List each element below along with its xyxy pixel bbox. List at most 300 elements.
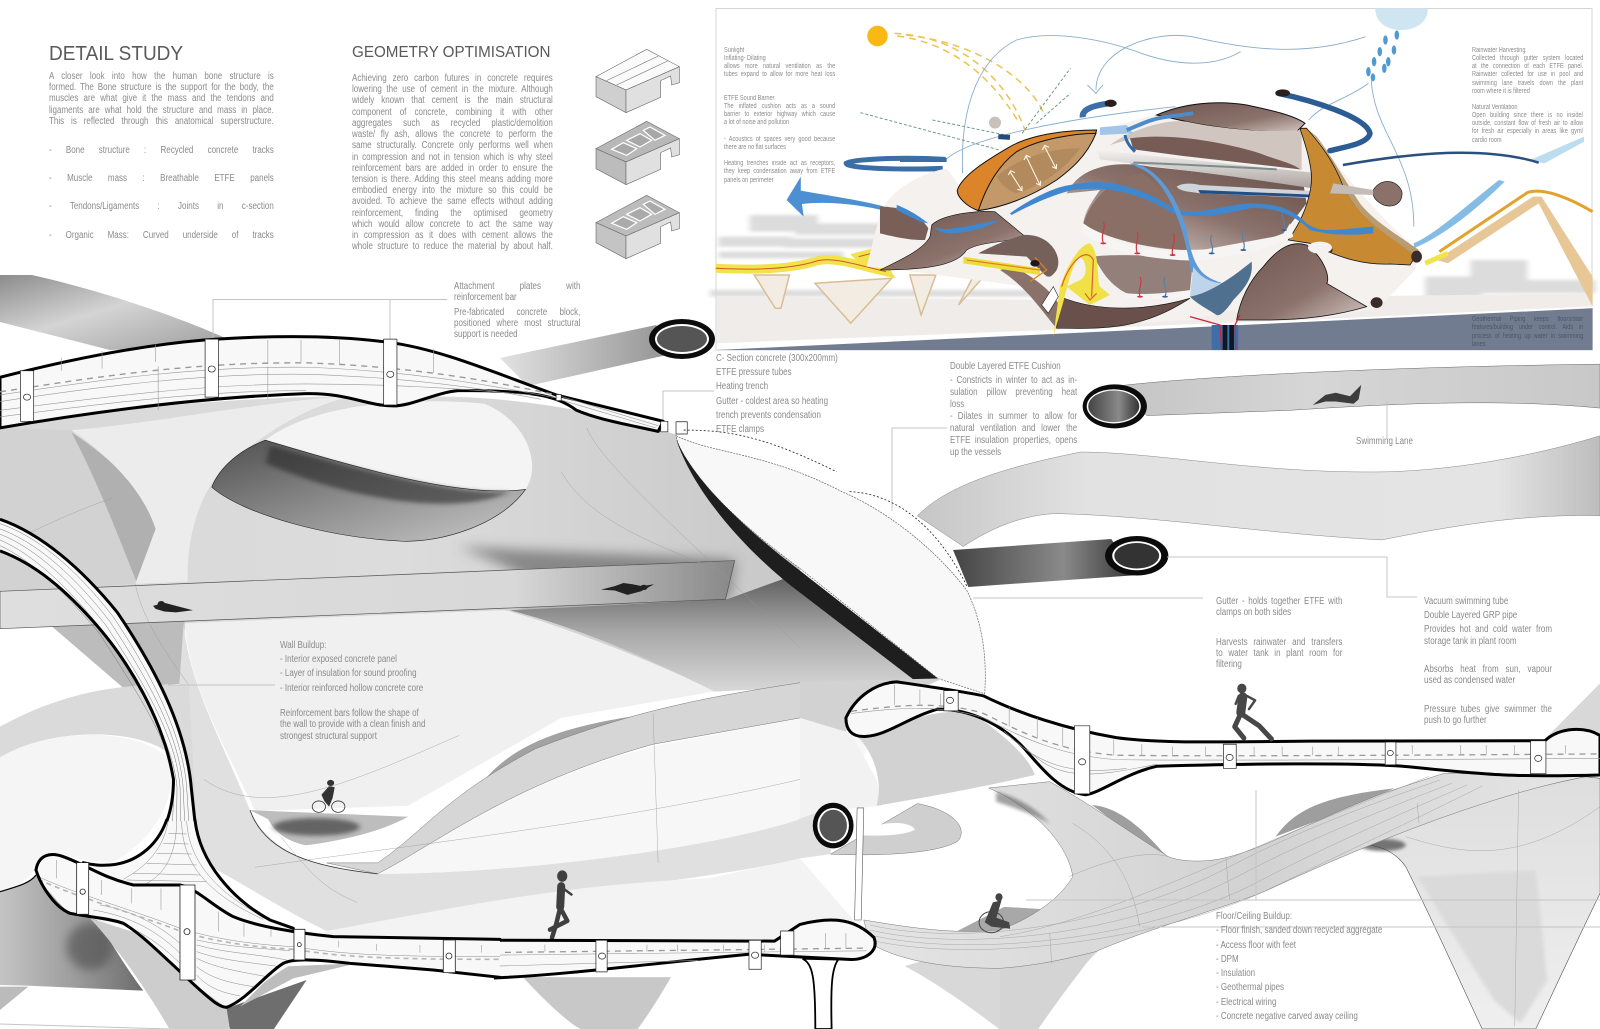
wall and track fill (36, 820, 500, 1007)
inset note: rainwater: Collected through gutter system located (1472, 55, 1583, 62)
note: vacuum tube: Vacuum swimming tube (1424, 596, 1508, 606)
ochre strip (1307, 128, 1419, 255)
ribbon body (864, 773, 1586, 968)
note: wall buildup: Wall Buildup: (280, 640, 326, 650)
note: absorbs heat: used as condensed water (1424, 675, 1515, 686)
inset note: sound barrier: ETFE Sound Barrier (724, 94, 774, 102)
right lower shell (510, 573, 939, 692)
inset note: rainwater: room where it is filtered (1472, 88, 1530, 95)
inset note: sunlight: allows more natural ventilation as the (724, 63, 835, 70)
swimmer far (601, 583, 654, 595)
upper band dark (1130, 137, 1300, 169)
note: concrete block: positioned where most structural (454, 318, 580, 329)
label: swimming lane: Swimming Lane (1356, 436, 1413, 447)
left panel shadow wedge (71, 432, 156, 583)
dark sockets (1327, 247, 1422, 308)
note: constricts: sulation pillow preventing heat (950, 387, 1077, 398)
ledge edge (250, 810, 378, 874)
note: floor and ceiling buildup: - Electrical wiring (1216, 997, 1276, 1008)
dark dome edge (676, 439, 939, 681)
note: vacuum tube: Double Layered GRP pipe (1424, 610, 1517, 621)
text: geometry body: waste/ fly ash, allows the concrete to perform the (352, 129, 553, 140)
runner man (1235, 684, 1271, 739)
bottom funnel left (905, 938, 1098, 1029)
text: detail study intro: muscles are what give it the mass and the tendons and (49, 93, 274, 104)
opening shadow (212, 440, 526, 541)
inflate arrows (1008, 145, 1057, 191)
inset note: geothermal (1472, 316, 1584, 348)
inset note: heating trenches: they keep condensation away from ETFE (724, 168, 835, 175)
inset note: sound barrier (724, 94, 835, 126)
note: concrete block: Pre-fabricated concrete block, (454, 307, 580, 318)
yellow loop (1053, 243, 1110, 337)
left lobe (880, 211, 1023, 270)
note: constricts: loss (950, 399, 964, 410)
light funnel (1190, 267, 1225, 297)
text: geometry body: reinforcement, finding the optimised geometry (352, 208, 553, 219)
note: wall buildup: - Layer of insulation for sound proofing (280, 668, 417, 679)
right track section (494, 682, 1600, 1029)
right ochre panel (1288, 128, 1419, 265)
wall outer line (0, 519, 195, 821)
text: detail study intro: ligaments are what hold the structure and mass in place. (49, 105, 274, 116)
note: attachment plates: Attachment plates with (454, 281, 580, 292)
hollow (1308, 242, 1332, 254)
mid shell shading (459, 547, 735, 608)
stem black two (1229, 325, 1234, 350)
left blue exit ribbon (787, 177, 934, 232)
blue stream (1130, 163, 1223, 285)
note: c-section list: Gutter - coldest area so heating (716, 396, 828, 407)
yellow wedge (963, 257, 1040, 275)
text: anatomy list (49, 144, 274, 241)
inset note: geothermal: process of heating up water in swimming (1472, 333, 1583, 340)
note: concrete block (454, 307, 580, 340)
swimming lane strip (0, 561, 735, 629)
wall inner line (0, 551, 173, 821)
lower left flank (1000, 267, 1062, 328)
note: wall buildup: - Interior exposed concrete panel (280, 654, 397, 665)
note: c-section list: trench prevents condensation (716, 410, 821, 421)
note: dilates: - Dilates in summer to allow for (950, 411, 1077, 422)
text: geometry body: avoided. To achieve the same effects without adding (352, 196, 553, 207)
wall section band (0, 519, 195, 821)
inset note: ventilation: outside, constant flow of fresh air to allow (1472, 120, 1583, 127)
wedge hole (1030, 260, 1040, 267)
swim tube end (1083, 384, 1147, 428)
note: reinforcement bars: Reinforcement bars follow the shape of (280, 708, 419, 719)
inset note: rainwater (1472, 46, 1584, 95)
text: detail study intro: This is reflected through this anatomical superstructure. (49, 116, 274, 127)
lower ribbon continuation (799, 806, 836, 858)
inset note: heating trenches: panels on perimeter (724, 177, 774, 184)
note: floor and ceiling buildup: - Geothermal pipes (1216, 982, 1284, 993)
lower grey shell left (800, 678, 943, 733)
dome dotted second (849, 492, 967, 586)
dome clamp dotted (684, 430, 837, 472)
ribbon top right (917, 436, 1600, 547)
bottom track right joints (596, 931, 794, 972)
swimmer near (153, 601, 193, 612)
note: gutter: clamps on both sides (1216, 607, 1291, 618)
funnel wire lines (1406, 790, 1600, 1027)
right mountain strand (1439, 191, 1593, 252)
note: absorbs heat: Absorbs heat from sun, vapour (1424, 664, 1552, 674)
text: geometry body: lowering the use of cement in the mixture. Although (352, 84, 553, 95)
funnel blue grey (1190, 262, 1252, 315)
track outline thick (36, 820, 500, 1007)
inset note: sound barrier: a lot of noise and pollution (724, 119, 789, 126)
ring center (851, 823, 915, 836)
isometric block 3 (596, 195, 679, 259)
upper track section (0, 337, 967, 586)
inset panel: environmental section (710, 8, 1595, 350)
ground top highlight (717, 307, 1593, 349)
white bar tube (1097, 150, 1323, 189)
inset note: heating trenches (724, 160, 835, 184)
inset note: ventilation: cardio room (1472, 137, 1502, 144)
wall hatching (38, 820, 500, 996)
white fin (1042, 287, 1058, 313)
second tube blue strip (1198, 190, 1321, 198)
upper cap (1157, 103, 1305, 132)
ground shading (717, 293, 1593, 343)
right mountain arrow (1425, 253, 1448, 263)
inset note: acoustics: - Acoustics of spaces very good because (724, 136, 835, 143)
pale bottom wall (306, 858, 857, 940)
opening dark core (265, 445, 510, 504)
upper joints (20, 339, 687, 434)
orange inner (978, 133, 1096, 211)
note: floor and ceiling buildup: - Floor finish, sanded down recycled aggregate (1216, 925, 1382, 936)
note: concrete block: support is needed (454, 329, 518, 340)
lower middle dome (1093, 255, 1193, 294)
text: anatomy list: - Bone structure : Recycled concrete tracks (49, 144, 274, 156)
note: reinforcement bars: the wall to provide with a clean finish and (280, 719, 425, 730)
bottom track right truss (494, 933, 866, 966)
geothermal stem (1212, 325, 1238, 350)
inset note: geothermal: Geothermal Piping keeps floors/stair (1472, 316, 1583, 323)
note: attachment plates: reinforcement bar (454, 292, 517, 303)
note: reinforcement bars: strongest structural support (280, 731, 377, 742)
stem red (1190, 315, 1240, 350)
swimmer in tube (1313, 385, 1361, 405)
blob top edge (0, 875, 36, 892)
text: geometry body: widely known that cement is the main structural (352, 95, 553, 106)
top blue ribbon (1127, 113, 1193, 130)
note: floor and ceiling buildup: - Concrete negative carved away ceiling (1216, 1011, 1358, 1022)
wheelchair hump shade (953, 907, 1056, 933)
thin air currents (946, 35, 1414, 227)
hump a (1092, 805, 1188, 862)
text: geometry body: in compression and not in tension which is why steel (352, 152, 553, 163)
text: geometry body: same structurally. Concrete only performs well when (352, 140, 553, 151)
text: geometry body: tension is there. Adding this steel means adding more (352, 174, 553, 185)
white rib two (1123, 290, 1193, 299)
ring loop (831, 804, 961, 855)
large funnel (1364, 777, 1600, 1029)
inset note: sound barrier: barrier to exterior highway which cause (724, 111, 835, 118)
note: c-section list: ETFE clamps (716, 424, 764, 435)
ribbon inner shadow (996, 792, 1050, 823)
note: dilates: natural ventilation and lower the (950, 423, 1077, 434)
red heat squiggles (1102, 222, 1174, 297)
small node tube (998, 134, 1010, 140)
note: harvests: Harvests rainwater and transfers (1216, 636, 1342, 648)
cone supports (754, 272, 988, 323)
wall fill (0, 519, 195, 821)
inset note: acoustics: there are no flat surfaces (724, 144, 786, 151)
note: attachment plates (454, 281, 580, 303)
lower-left grey parallelogram (51, 621, 185, 687)
inset note: sunlight: Sunlight (724, 46, 744, 54)
vent streak right lower (1414, 180, 1505, 248)
blurred city blocks (710, 215, 1595, 300)
bottom track joints (77, 863, 455, 980)
text: detail study intro (49, 70, 274, 127)
lower right ribbon group (864, 683, 1600, 1029)
stem black (1223, 325, 1227, 350)
funnel shadow (1360, 839, 1406, 851)
bottom track left section (0, 820, 500, 1029)
yellow duct red core (716, 235, 926, 272)
bottom brown (1057, 297, 1190, 328)
note: gutter (1216, 596, 1342, 618)
S ribbon (327, 683, 816, 874)
upper track fill (0, 337, 663, 431)
note: floor and ceiling buildup: - DPM (1216, 954, 1239, 965)
top-left track tube (0, 275, 240, 350)
text: anatomy list: - Organic Mass: Curved underside of tracks (49, 230, 274, 241)
inset note: acoustics (724, 136, 835, 151)
inset note: rainwater: Rainwater Harvesting (1472, 46, 1526, 54)
text: geometry body: component of concrete, combining it with other (352, 107, 553, 118)
text: detail study intro: formed. The Bone structure is the support for the body, the (49, 82, 274, 93)
note: harvests: to water tank in plant room for (1216, 648, 1342, 659)
inset note: rainwater: swimming lane travels down the plant (1472, 80, 1583, 87)
inset note: rainwater: at the connection of each ETFE panel. (1472, 63, 1583, 70)
right mountain tan (1437, 197, 1593, 307)
central building (867, 89, 1422, 350)
lower right lump (1237, 244, 1367, 320)
inset note: sunlight (724, 46, 835, 78)
heat vents red (1100, 242, 1176, 298)
blue ribbon main (1010, 182, 1373, 235)
dashed green vent lines (860, 68, 1070, 150)
ETFE dome (676, 436, 985, 694)
note: pressure tubes: push to go further (1424, 715, 1486, 726)
note: c-section list: ETFE pressure tubes (716, 367, 792, 378)
inset note: ventilation (1472, 104, 1584, 144)
vertical stem (855, 808, 864, 920)
top blue patch (1100, 125, 1133, 135)
funnel under track (90, 918, 240, 1029)
left lump (880, 207, 928, 240)
text: geometry body: Achieving zero carbon futures in concrete requires (352, 73, 553, 84)
small right funnel (1547, 683, 1600, 740)
ground slab (717, 308, 1593, 350)
vent streak right upper (1530, 137, 1584, 163)
hump b (1276, 788, 1394, 837)
text: detail study intro: A closer look into how the human bone structure is (49, 70, 274, 82)
tube section ellipse (813, 803, 854, 848)
inset note: geothermal: lanes (1472, 341, 1485, 348)
note: double layered heading: Double Layered ETFE Cushion (950, 361, 1061, 372)
inset note: heating trenches: Heating trenches inside act as receptors, (724, 160, 835, 167)
rain drops (1366, 30, 1399, 81)
text: geometry body: aggregates such as recycled plastic/demolition (352, 118, 553, 129)
right side bump (1373, 181, 1402, 206)
right track fill (846, 682, 1600, 795)
note: constricts (950, 375, 1078, 410)
callout lines (0, 300, 1600, 1029)
pale lower wall (185, 610, 714, 811)
runner woman (550, 870, 571, 938)
inset note: geothermal: features/building under control. Aids in (1472, 324, 1583, 331)
inset note: ventilation: Natural Ventilation (1472, 104, 1517, 110)
inset note: rainwater: Rainwater collected for use in pool and (1472, 71, 1583, 78)
note: dilates (950, 411, 1077, 458)
text: geometry body: which would allow concrete to act the same way (352, 219, 553, 230)
text: geometry body: in compression as it does with cement allows the (352, 230, 553, 241)
orange inner darker (997, 148, 1080, 193)
text: geometry body: whole structure to reduce the material by about half. (352, 241, 553, 252)
note: constricts: - Constricts in winter to act as in- (950, 375, 1077, 386)
wavy dark stroke right (1343, 153, 1539, 165)
text: geometry body: embodied energy into the mixture so this could be (352, 185, 553, 196)
note: c-section list: Heating trench (716, 381, 768, 392)
note: gutter: Gutter - holds together ETFE with (1216, 596, 1342, 607)
ribbon hump (474, 713, 653, 793)
note: wall buildup: - Interior reinforced hollow concrete core (280, 683, 423, 694)
lower left dome (978, 235, 1058, 277)
main body shell (0, 396, 800, 692)
note: vacuum tube (1424, 596, 1517, 621)
title: detail study: DETAIL STUDY (49, 43, 183, 65)
note: floor and ceiling buildup: Floor/Ceiling Buildup: (1216, 911, 1292, 922)
second tube (953, 539, 1137, 587)
far left tubes (900, 160, 947, 169)
orange panel (957, 130, 1097, 211)
bar to bump (1330, 183, 1373, 195)
right half of lower art (676, 364, 1600, 1029)
note: provides water: Provides hot and cold water from (1424, 624, 1552, 635)
dark blob under track (0, 875, 143, 991)
ledge shadow (273, 818, 360, 836)
inset note: sunlight: Inflating- Dilating (724, 55, 766, 62)
sun rays dashed (894, 33, 1045, 130)
small node (989, 117, 1001, 129)
cloud (1375, 8, 1428, 30)
upper tube end (1275, 89, 1290, 97)
light arch (71, 395, 357, 584)
note: floor and ceiling buildup: - Insulation (1216, 968, 1255, 979)
swim tube (1116, 364, 1600, 416)
isometric block 2 (596, 121, 679, 185)
note: provides water: storage tank in plant room (1424, 636, 1516, 647)
text: anatomy list: - Tendons/Ligaments : Joints in c-section (49, 201, 274, 212)
note: floor and ceiling buildup: - Access floor with feet (1216, 940, 1296, 951)
isometric block 1 (596, 49, 679, 113)
left ribbon band (0, 685, 196, 837)
note: floor and ceiling buildup (1216, 911, 1382, 1022)
note: provides water (1424, 624, 1552, 647)
cyclist ledge (250, 810, 408, 845)
funnel core shade (1417, 870, 1547, 1023)
left white lobe (0, 735, 172, 891)
funnel bottom middle (523, 977, 671, 1029)
blue ribbon lower left (933, 220, 1000, 233)
white ribbon below (800, 718, 882, 821)
shell behind track (856, 712, 1035, 806)
text: geometry body: reinforcement bars are added in order to ensure the (352, 163, 553, 174)
small blue tube (1083, 103, 1110, 117)
upper blue tube (1278, 93, 1370, 151)
dome darker (1083, 173, 1190, 250)
wedge red line (967, 257, 1047, 282)
note: reinforcement bars (280, 708, 425, 742)
white shell (867, 113, 1419, 328)
thin column below track (803, 959, 838, 1029)
sun (867, 26, 888, 46)
top blue stem (1125, 135, 1135, 152)
title: geometry optimisation: GEOMETRY OPTIMISATION (352, 44, 550, 61)
right track truss (851, 685, 1600, 774)
wedge under joint (240, 963, 357, 1007)
note: c-section list: C- Section concrete (300x200mm) (716, 353, 838, 364)
small tube end (1105, 100, 1117, 107)
blue ribbon far left (897, 205, 928, 223)
lower architectural section (0, 364, 1600, 1029)
upper band (1110, 121, 1302, 170)
note: absorbs heat (1424, 664, 1552, 686)
bottom track end outline (494, 920, 875, 978)
cyclist (312, 780, 345, 812)
pressure tube behind upper track (500, 319, 715, 386)
panel frame (716, 8, 1592, 350)
inset note: ventilation: Open building since there is no inside/ (1472, 112, 1583, 119)
wheelchair user (979, 893, 1010, 933)
lower ribbon band (168, 623, 800, 931)
yellow loop red line (1062, 255, 1097, 300)
dark funnel right (227, 980, 307, 1029)
right track joints (944, 691, 1546, 794)
white lens (378, 718, 878, 874)
left tube (846, 158, 946, 169)
blob core shade (67, 923, 113, 970)
teal line (1133, 163, 1277, 169)
second tube (1177, 184, 1332, 198)
inset note: sunlight: tubes expand to allow for more heat loss (724, 71, 835, 78)
left bottom funnel (1000, 952, 1096, 1029)
white rib (1082, 223, 1293, 261)
upper track truss (0, 340, 658, 428)
note: pressure tubes (1424, 704, 1552, 726)
note: pressure tubes: Pressure tubes give swimmer the (1424, 704, 1552, 714)
text: geometry body (352, 73, 553, 252)
elliptical opening (265, 401, 532, 491)
text: anatomy list: - Muscle mass : Breathable ETFE panels (49, 173, 274, 184)
far left end of bottom track fill (494, 920, 875, 978)
second tube end (1105, 536, 1168, 576)
central dome (1067, 164, 1307, 250)
note: c-section list (716, 353, 838, 435)
note: wall buildup (280, 640, 423, 694)
inset note: ventilation: for fresh air especially in areas like gym/ (1472, 128, 1583, 135)
note: dilates: ETFE insulation properties, opens (950, 435, 1077, 446)
note: harvests (1216, 636, 1342, 670)
note: dilates: up the vessels (950, 447, 1001, 458)
